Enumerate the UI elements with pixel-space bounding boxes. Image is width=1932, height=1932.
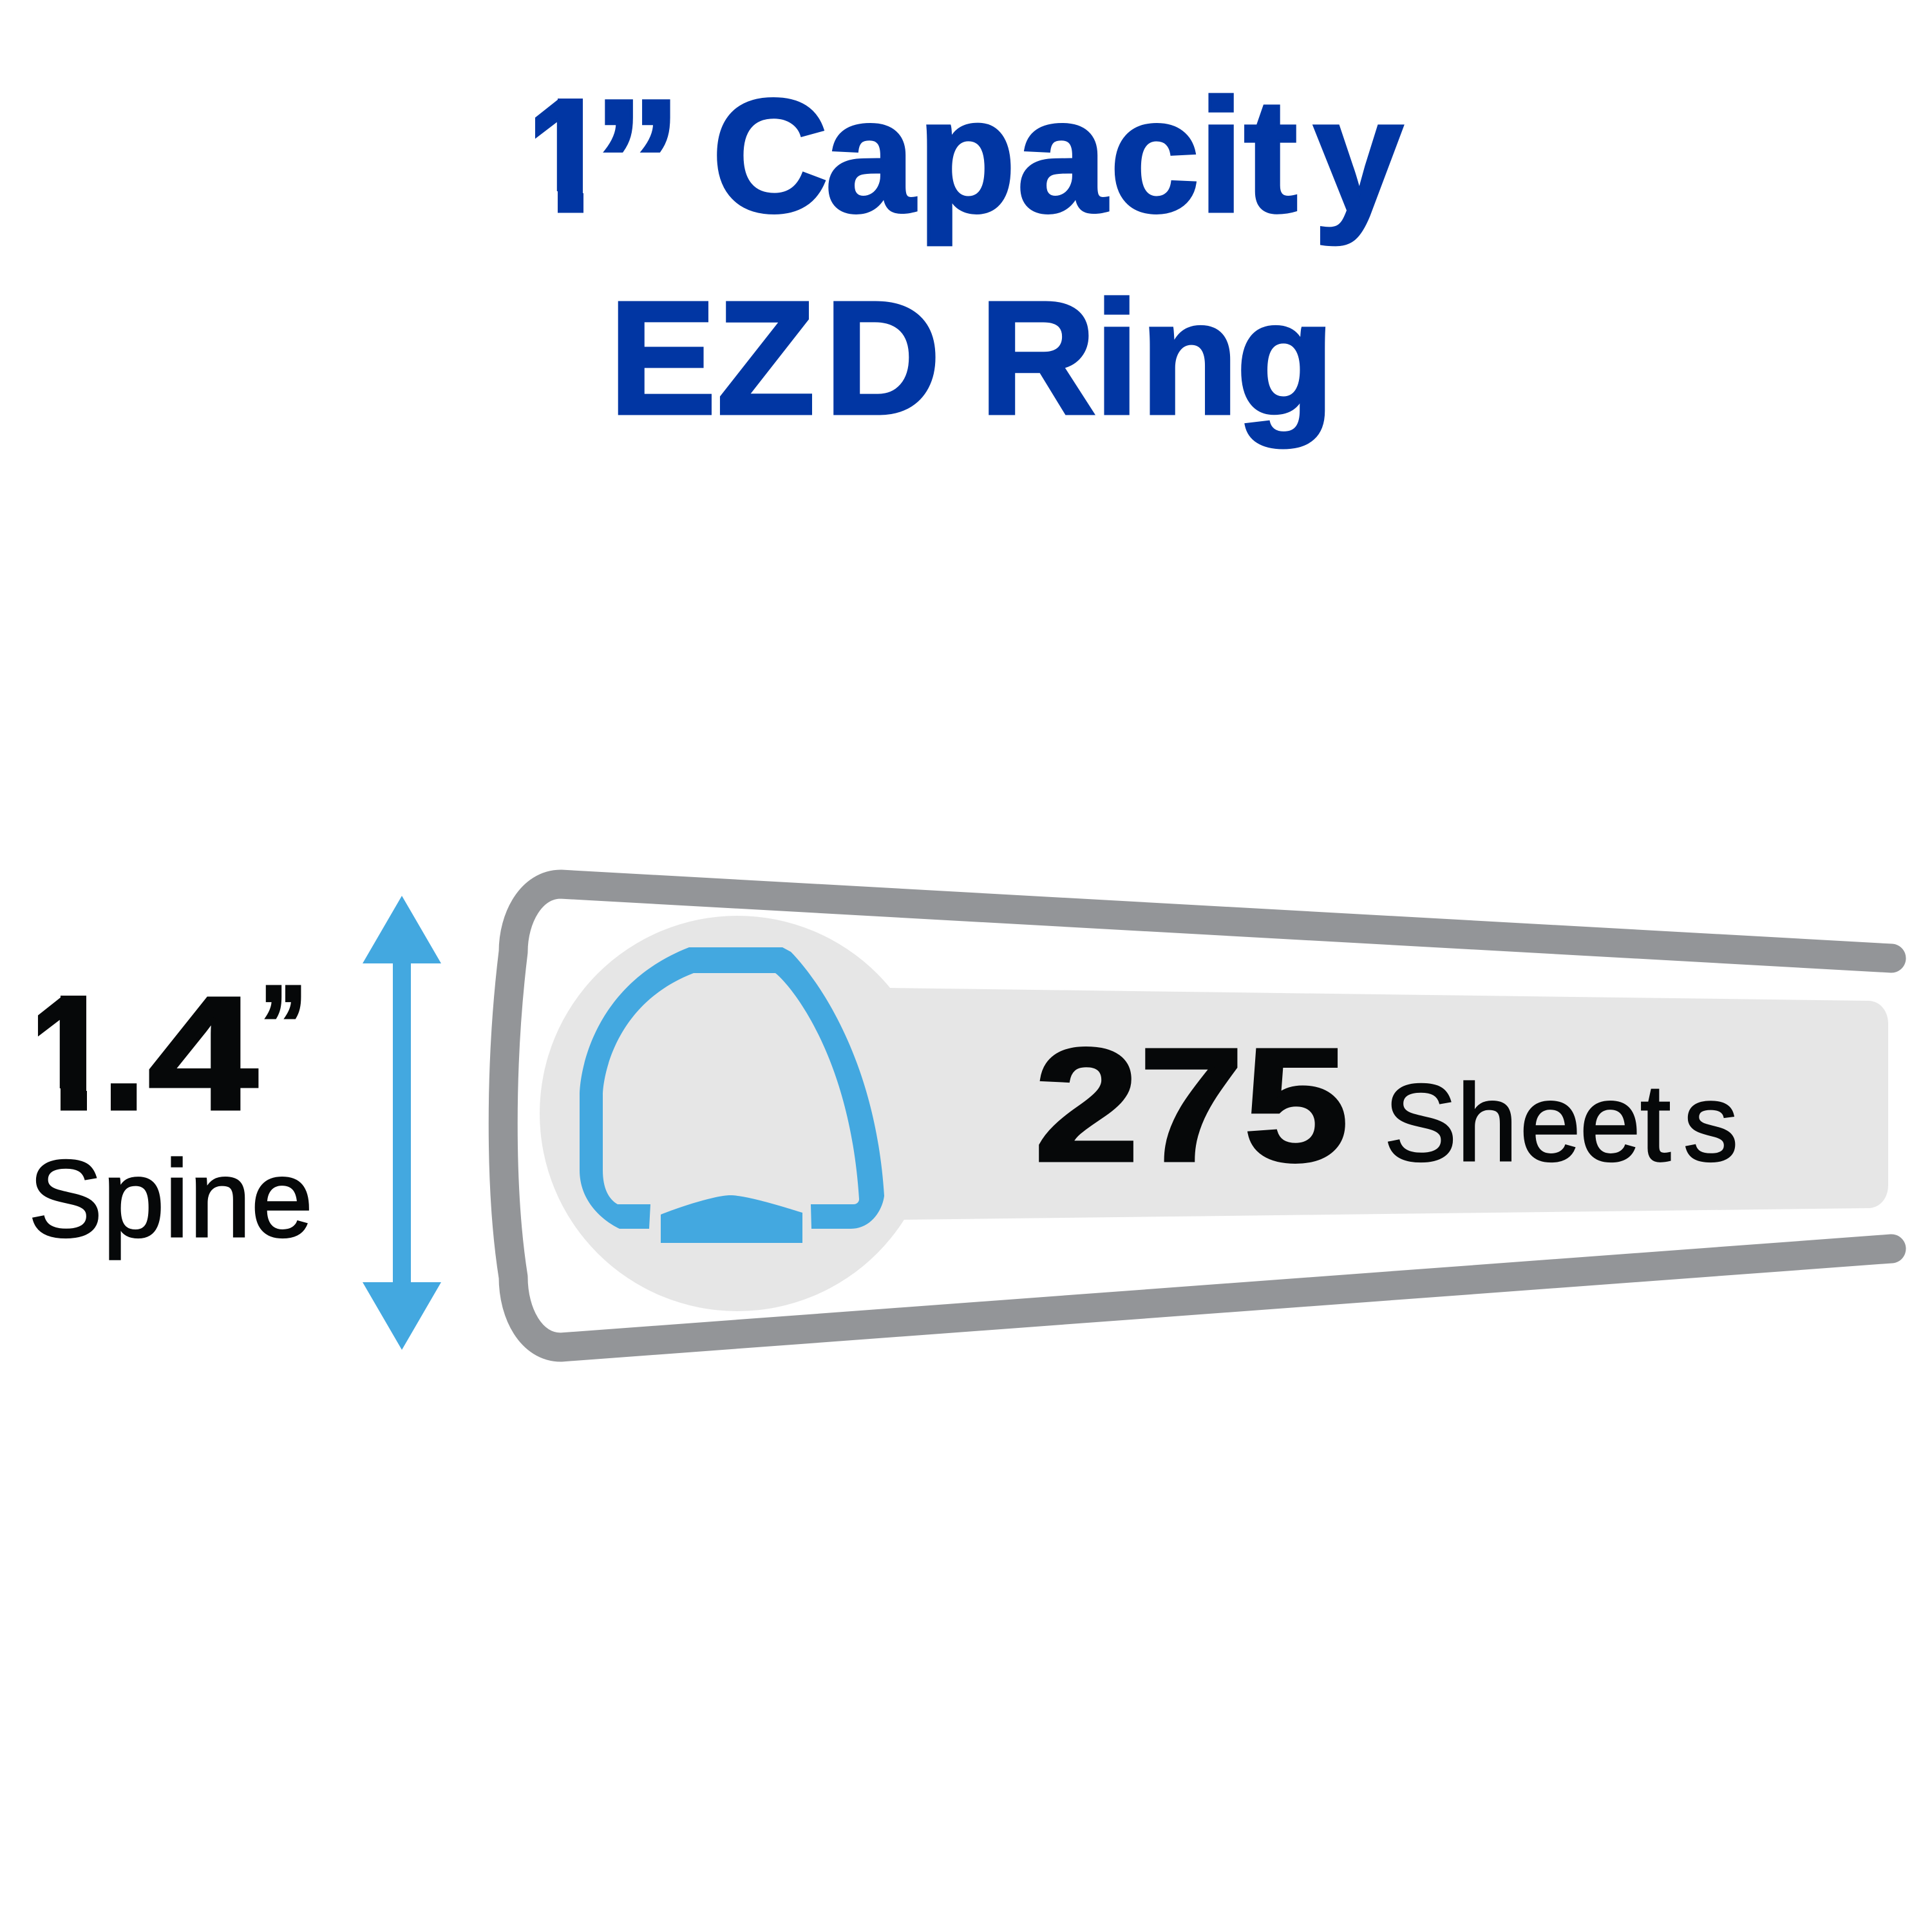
spine measurement label: ” — [260, 963, 307, 1086]
spine measurement label: 1 — [30, 963, 104, 1143]
title: ” — [593, 63, 681, 261]
sheet count: 275 — [1034, 1015, 1349, 1195]
sheet count: Sheets — [1384, 1062, 1738, 1184]
sheet capacity band and ring circle — [540, 916, 1888, 1311]
arrow: spine height — [363, 896, 441, 1350]
sheet count — [1034, 1015, 1738, 1195]
title: 1 — [527, 66, 601, 245]
spine measurement label: Spine — [28, 1138, 313, 1260]
binder cover outline — [503, 884, 1891, 1347]
icon: EZD ring — [580, 947, 884, 1243]
title: Capacity — [712, 66, 1403, 245]
spine measurement label: 4 — [148, 963, 258, 1143]
spine measurement label: . — [102, 963, 146, 1143]
title — [527, 63, 1403, 448]
title: EZD Ring — [609, 268, 1334, 448]
spine measurement label — [26, 963, 313, 1260]
